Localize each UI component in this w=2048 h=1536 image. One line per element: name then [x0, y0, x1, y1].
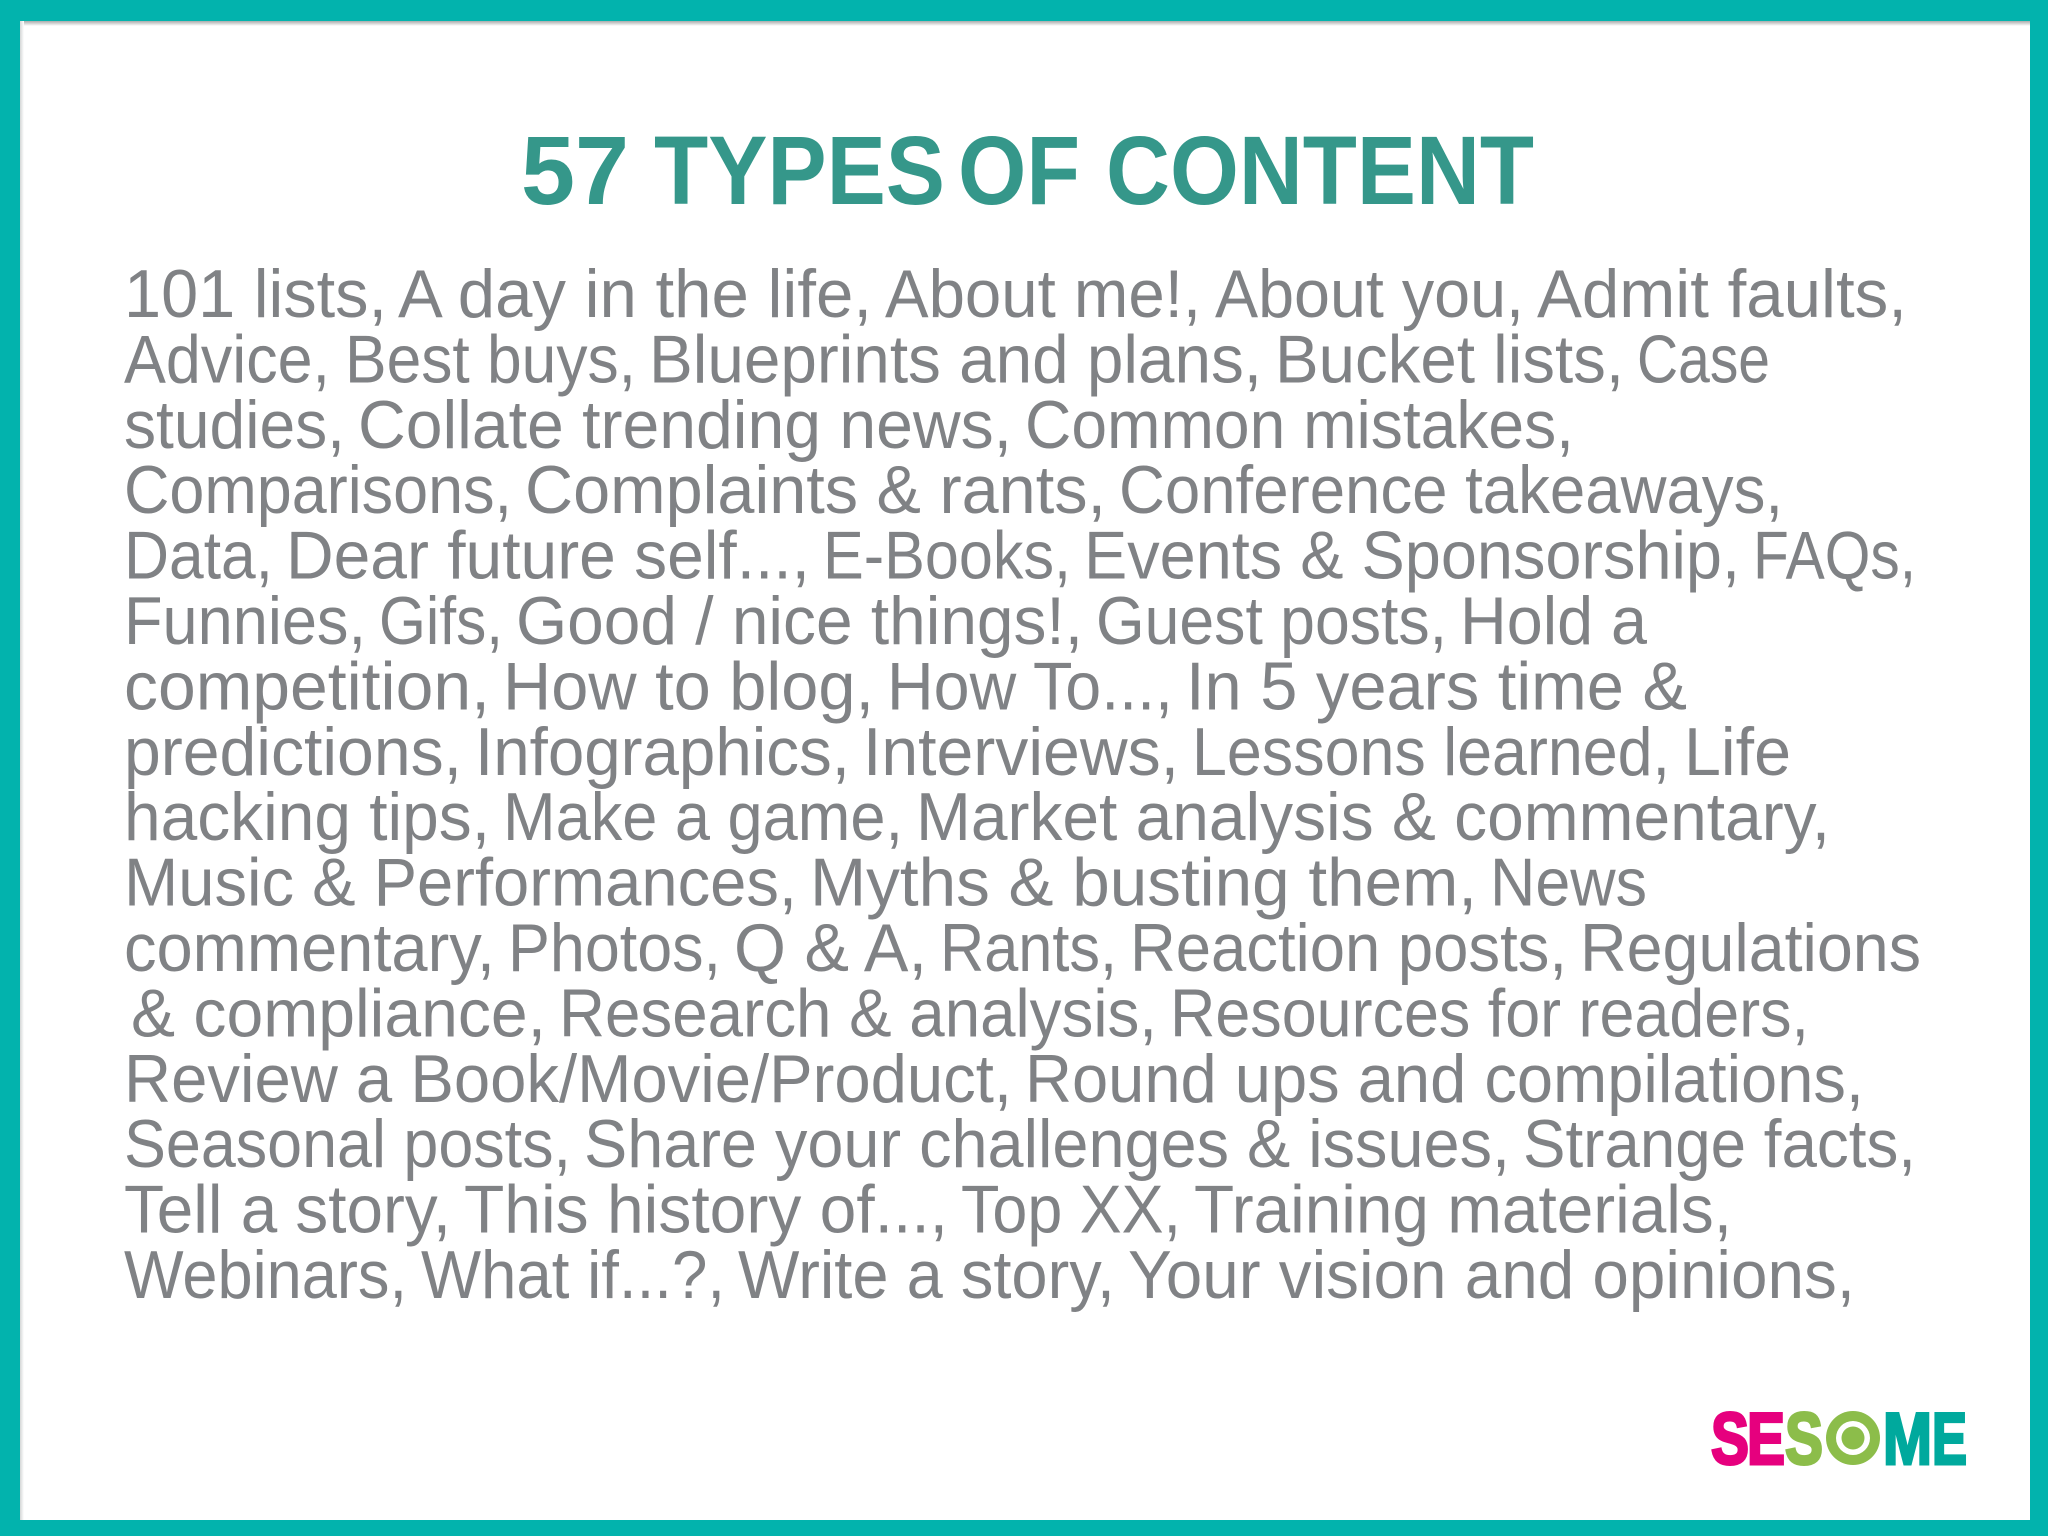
logo: SESOME: E — [1932, 1399, 1967, 1480]
title: 57 — [521, 116, 629, 225]
line 8: Interviews, — [863, 714, 1179, 790]
logo: SESOME — [1711, 1399, 1967, 1480]
line 2: Bucket lists, — [1275, 321, 1624, 397]
line 14: Seasonal posts, — [124, 1106, 571, 1182]
line 4: Complaints & rants, — [525, 452, 1106, 528]
line 8: predictions, — [124, 714, 462, 790]
line 6: Good / nice things!, — [516, 583, 1083, 659]
line 7: In 5 years time & — [1186, 648, 1687, 724]
logo: SESOME: S — [1711, 1399, 1749, 1480]
line 9: hacking tips, — [124, 779, 490, 855]
line 8: Life — [1684, 714, 1791, 790]
line 11: commentary, — [124, 910, 495, 986]
line 1: Admit faults, — [1537, 256, 1907, 332]
line 14: Strange facts, — [1523, 1106, 1916, 1182]
title: CONTENT — [1106, 116, 1534, 225]
line 7: How To..., — [887, 648, 1173, 724]
line 10 — [124, 845, 1647, 921]
line 7: competition, — [124, 648, 490, 724]
line 5: Dear future self..., — [286, 518, 810, 594]
line 11: Q & A, — [734, 910, 927, 986]
line 13: Round ups and compilations, — [1025, 1041, 1864, 1117]
line 9: Make a game, — [503, 779, 903, 855]
title: OF — [958, 116, 1080, 225]
line 2: Case — [1637, 321, 1770, 397]
line 3: studies, — [124, 387, 345, 463]
line 6: Funnies, — [124, 583, 366, 659]
line 11: Regulations — [1580, 910, 1921, 986]
line 6: Guest posts, — [1096, 583, 1447, 659]
line 16 — [124, 1237, 1855, 1313]
line 3 — [124, 387, 1574, 463]
line 1: A day in the life, — [398, 256, 872, 332]
line 8: Lessons learned, — [1192, 714, 1670, 790]
line 7: How to blog, — [503, 648, 874, 724]
line 6: Gifs, — [379, 583, 503, 659]
line 3: Common mistakes, — [1025, 387, 1574, 463]
line 2 — [124, 321, 1770, 397]
line 1: 101 lists, — [124, 256, 387, 332]
line 2: Advice, — [124, 321, 330, 397]
line 15: Top XX, — [961, 1172, 1181, 1248]
text block: list of content types — [124, 256, 1921, 1313]
line 6 — [124, 583, 1647, 659]
line 8: Infographics, — [475, 714, 850, 790]
line 10: Music & Performances, — [124, 845, 797, 921]
line 10: News — [1490, 845, 1647, 921]
line 5: FAQs, — [1753, 518, 1916, 594]
logo: SESOME: S — [1785, 1399, 1823, 1480]
line 9: Market analysis & commentary, — [916, 779, 1830, 855]
line 7 — [124, 648, 1687, 724]
logo: SESOME: O — [1826, 1399, 1880, 1480]
line 12: Resources for readers, — [1170, 975, 1809, 1051]
line 6: Hold a — [1460, 583, 1647, 659]
line 2: Blueprints and plans, — [649, 321, 1262, 397]
line 11 — [124, 910, 1921, 986]
line 11: Rants, — [940, 910, 1117, 986]
line 4 — [124, 452, 1783, 528]
line 13 — [124, 1041, 1864, 1117]
line 1: About me!, — [885, 256, 1201, 332]
line 13: Review a Book/Movie/Product, — [124, 1041, 1012, 1117]
line 16: Webinars, — [124, 1237, 407, 1313]
line 5: Data, — [124, 518, 273, 594]
line 5: E-Books, — [823, 518, 1071, 594]
line 8 — [124, 714, 1791, 790]
line 12: Research & analysis, — [559, 975, 1157, 1051]
line 15: Tell a story, — [124, 1172, 451, 1248]
line 16: Write a story, — [738, 1237, 1115, 1313]
title: TYPES — [654, 116, 945, 225]
line 15: This history of..., — [464, 1172, 948, 1248]
line 16: Your vision and opinions, — [1128, 1237, 1855, 1313]
line 2: Best buys, — [345, 321, 636, 397]
line 11: Reaction posts, — [1130, 910, 1567, 986]
line 15: Training materials, — [1194, 1172, 1732, 1248]
line 9 — [124, 779, 1830, 855]
line 5: Events & Sponsorship, — [1084, 518, 1740, 594]
logo: SESOME: E — [1747, 1399, 1785, 1480]
line 4: Comparisons, — [124, 452, 512, 528]
title — [521, 116, 1534, 225]
line 14: Share your challenges & issues, — [584, 1106, 1510, 1182]
line 10: Myths & busting them, — [810, 845, 1477, 921]
line 11: Photos, — [508, 910, 721, 986]
line 12: & compliance, — [131, 975, 546, 1051]
line 1: About you, — [1215, 256, 1524, 332]
line 3: Collate trending news, — [358, 387, 1012, 463]
line 14 — [124, 1106, 1916, 1182]
line 15 — [124, 1172, 1732, 1248]
line 5 — [124, 518, 1916, 594]
logo: SESOME: M — [1883, 1399, 1932, 1480]
line 12 — [131, 975, 1809, 1051]
line 16: What if...?, — [421, 1237, 725, 1313]
line 4: Conference takeaways, — [1119, 452, 1783, 528]
line 1 — [124, 256, 1907, 332]
